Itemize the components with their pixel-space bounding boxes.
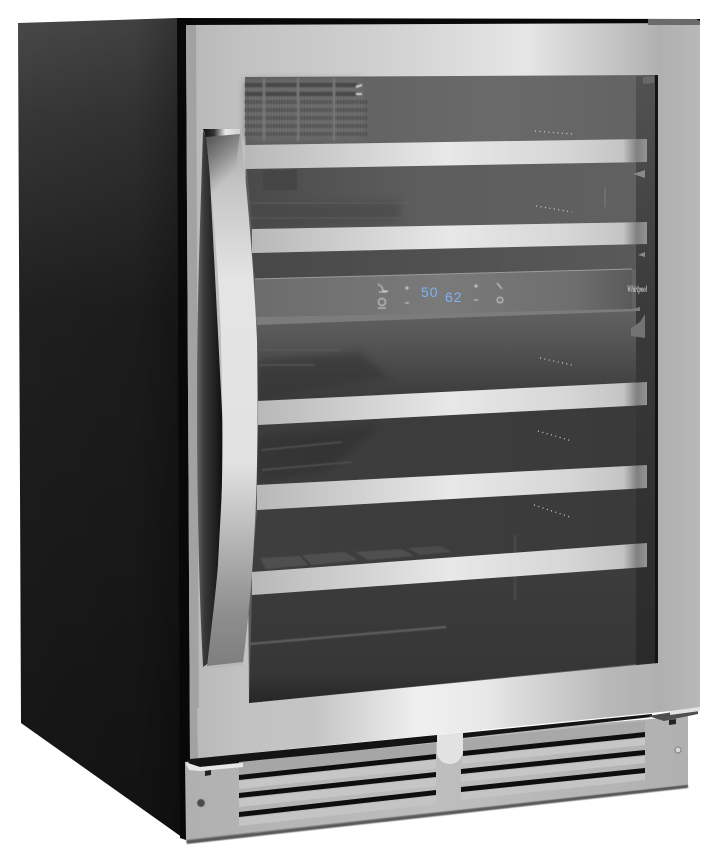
control icons (378, 283, 503, 308)
handle shadow (197, 131, 224, 667)
temperature display 50: 50 (421, 284, 439, 300)
interior: upper rack reflection (245, 78, 367, 141)
hinge top (648, 19, 700, 25)
wine shelf 4 (257, 465, 647, 510)
glass window with interior (245, 75, 658, 703)
interior: shelf-end dots (534, 131, 572, 517)
lower hinges (185, 762, 243, 771)
right edge strip (636, 75, 658, 665)
wine shelf 1 (245, 139, 647, 169)
interior: faint bottle and rack reflections (250, 170, 605, 644)
cabinet side panel (18, 18, 186, 840)
base grille (185, 707, 700, 844)
brand logo: Whirlpool (627, 284, 647, 294)
wine shelf 3 (258, 382, 647, 425)
interior: dark sections between shelves (247, 162, 647, 229)
dark gap below door (188, 735, 437, 767)
door handle (197, 129, 258, 669)
temperature display 62: 62 (445, 289, 463, 305)
grille louvers right (461, 721, 645, 800)
left screw (197, 799, 205, 807)
center tab (437, 732, 463, 764)
base shadow line (186, 785, 688, 844)
grille louvers left (239, 743, 436, 826)
right screw (675, 747, 681, 753)
control panel (255, 269, 647, 325)
door frame (177, 18, 700, 840)
wine shelf 5 (252, 543, 647, 595)
wine shelf 2 (252, 222, 647, 253)
handle grip (206, 130, 258, 667)
